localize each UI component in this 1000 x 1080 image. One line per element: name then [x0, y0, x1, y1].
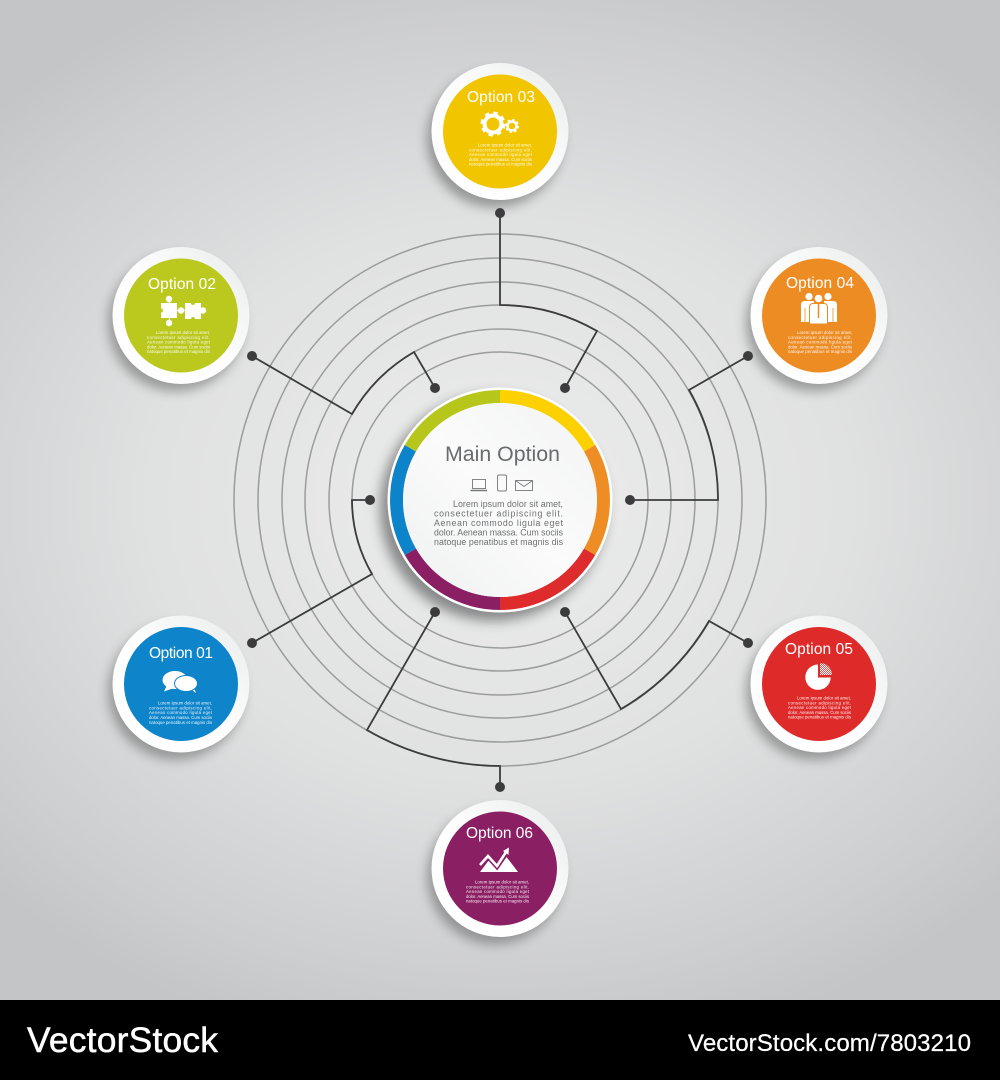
panel: option 01 — [108, 616, 250, 760]
body text: option 06: natoque penatibus et magnis dis — [466, 899, 529, 904]
body text: option 03: dolor. Aenean massa. Cum sociis — [469, 157, 532, 162]
body text: option 03: natoque penatibus et magnis dis — [469, 162, 532, 167]
body text: option 05: Aenean commodo ligula eget — [788, 705, 852, 710]
body text: option 02: consectetuer adipiscing elit. — [147, 335, 210, 340]
icon: gears — [482, 113, 518, 135]
body text: option 04: consectetuer adipiscing elit. — [788, 335, 852, 340]
title: option 02: Option 02 — [148, 276, 216, 293]
title: option 01: Option 01 — [149, 645, 213, 662]
footer brand: VectorStock — [27, 1020, 218, 1060]
panel: option 06 — [427, 800, 568, 944]
main body text: natoque penatibus et magnis dis — [434, 537, 564, 547]
icon: phone — [498, 475, 506, 491]
body text: option 03: consectetuer adipiscing elit. — [469, 147, 532, 152]
body text: option 06: consectetuer adipiscing elit. — [466, 884, 529, 889]
body text: option 01: dolor. Aenean massa. Cum sociis — [149, 715, 212, 720]
connector: option 06 — [367, 607, 505, 792]
body text: option 05: Lorem ipsum dolor sit amet, — [797, 696, 851, 700]
connectors — [247, 208, 753, 792]
concentric rings — [234, 234, 766, 766]
title: option 03: Option 03 — [467, 89, 535, 106]
panel: option 02 — [108, 247, 250, 392]
inner disc — [403, 403, 597, 597]
body text: option 05 — [788, 696, 852, 720]
main body text: Aenean commodo ligula eget — [434, 518, 564, 528]
body text: option 01: Lorem ipsum dolor sit amet, — [158, 701, 212, 706]
panel: main option — [380, 388, 612, 621]
icon: puzzle pieces — [159, 296, 206, 326]
icon: speech bubbles — [162, 671, 198, 693]
icon: team of people — [801, 293, 837, 324]
body text: option 01 — [149, 701, 213, 725]
body text: option 06: Aenean commodo ligula eget — [466, 889, 530, 894]
panel: option 04 — [746, 247, 888, 392]
connector: option 03 — [495, 208, 597, 393]
main body text — [434, 499, 564, 547]
icon: pie chart — [805, 663, 832, 690]
body text: option 04: Lorem ipsum dolor sit amet, — [797, 330, 852, 335]
footer image id: VectorStock.com/7803210 — [688, 1030, 971, 1057]
icon: laptop — [470, 480, 487, 490]
panel: option 03 — [427, 63, 568, 208]
connector: option 04 — [625, 351, 753, 505]
connector: option 02 — [247, 351, 440, 414]
icon: mountains with rising arrow — [479, 848, 518, 872]
main body text: Lorem ipsum dolor sit amet, — [453, 499, 563, 509]
title: option 04: Option 04 — [786, 275, 854, 292]
body text: option 05: dolor. Aenean massa. Cum sociis — [788, 710, 851, 715]
heading: main option: Main Option — [445, 442, 560, 466]
body text: option 03 — [469, 142, 533, 167]
main body text: consectetuer adipiscing elit. — [434, 508, 563, 518]
body text: option 06 — [466, 880, 530, 904]
body text: option 05: natoque penatibus et magnis dis — [788, 715, 851, 720]
body text: option 03: Lorem ipsum dolor sit amet, — [478, 142, 532, 148]
body text: option 04 — [788, 330, 853, 354]
title: option 06: Option 06 — [466, 825, 533, 842]
body text: option 03: Aenean commodo ligula eget — [469, 152, 533, 157]
body text: option 02: Lorem ipsum dolor sit amet, — [156, 330, 210, 335]
body text: option 02: Aenean commodo ligula eget — [147, 340, 211, 345]
body text: option 02 — [147, 330, 211, 354]
main body text: dolor. Aenean massa. Cum sociis — [434, 528, 564, 538]
segmented colour ring — [397, 396, 603, 604]
body text: option 01: consectetuer adipiscing elit. — [149, 705, 212, 710]
body text: option 02: dolor. Aenean massa. Cum sociis — [147, 344, 210, 349]
panel: option 05 — [746, 616, 888, 760]
body text: option 04: Aenean commodo ligula eget — [788, 340, 853, 345]
connector: option 01 — [247, 495, 375, 648]
title: option 05: Option 05 — [785, 641, 853, 658]
icon: mail — [516, 480, 532, 490]
body text: option 04: natoque penatibus et magnis dis — [788, 349, 852, 354]
body text: option 01: natoque penatibus et magnis dis — [149, 720, 212, 725]
footer bar — [0, 1000, 1000, 1080]
body text: option 01: Aenean commodo ligula eget — [149, 710, 213, 715]
body text: option 02: natoque penatibus et magnis dis — [147, 349, 210, 354]
connector: option 05 — [560, 607, 753, 709]
body text: option 06: dolor. Aenean massa. Cum sociis — [466, 894, 529, 899]
body text: option 04: dolor. Aenean massa. Cum sociis — [788, 344, 852, 349]
body text: option 05: consectetuer adipiscing elit. — [788, 700, 851, 705]
body text: option 06: Lorem ipsum dolor sit amet, — [475, 880, 529, 884]
